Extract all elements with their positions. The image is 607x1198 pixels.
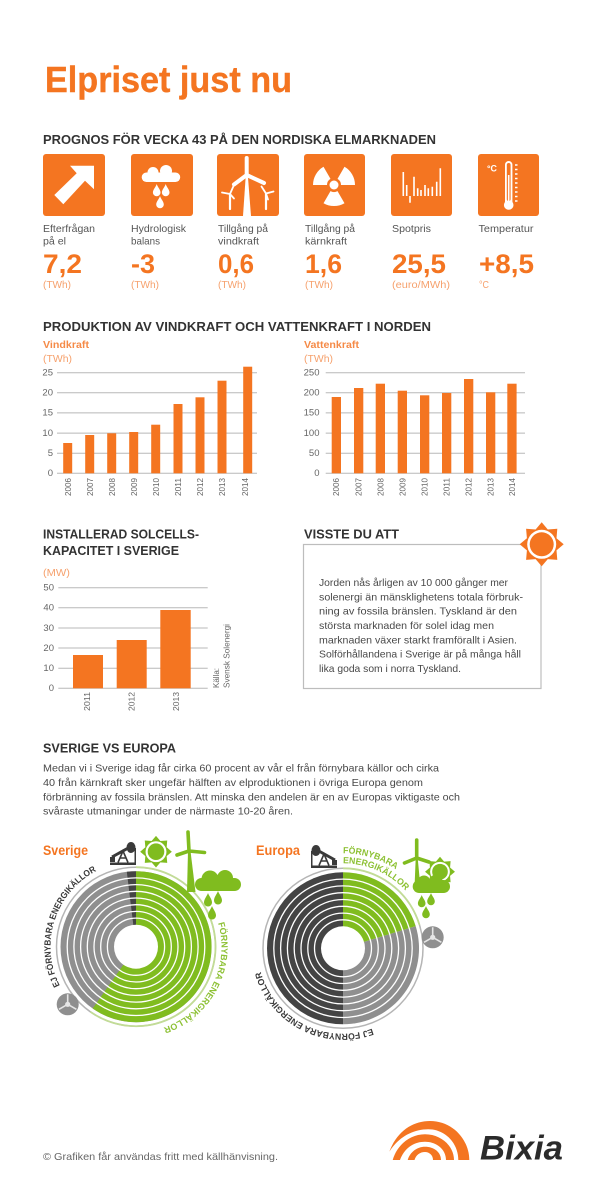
metric: wind supply: 0,6 (218, 249, 254, 279)
metric: nuclear supply: (TWh) (305, 280, 333, 291)
text block: solar facts: Jorden nås årligen av 10 000 gånger mer (319, 577, 508, 589)
metric: wind supply: Tillgång på (218, 223, 268, 235)
panel: did you know (304, 522, 564, 688)
text block: solar facts: största marknaden för solel idag men (319, 620, 494, 632)
bar chart: wind power: 2012 (195, 478, 205, 496)
bar chart: hydro power (304, 339, 525, 496)
source note: Källa: (211, 668, 221, 688)
bar chart: solar capacity: 2013 (171, 692, 181, 711)
logo: Bixia (389, 1121, 563, 1168)
metric: demand (43, 223, 95, 291)
heading: installed solar capacity: KAPACITET I SVERIGE (43, 543, 179, 558)
bar chart: solar capacity: 40 (43, 602, 54, 614)
heading: Sweden vs Europe: SVERIGE VS EUROPA (43, 740, 177, 756)
icon: green sun (425, 857, 455, 887)
icon: thermometer: °C (487, 164, 497, 174)
metric: spot price: 25,5 (392, 249, 446, 279)
bar chart: hydro power: 2010 (420, 478, 430, 496)
bar chart: wind power: 2013 (217, 478, 227, 496)
icon: hydrological cloud (131, 154, 193, 216)
bar chart: hydro power: 2008 (376, 478, 386, 496)
metric: wind supply: vindkraft (218, 236, 259, 248)
chart: Europe energy donut (255, 838, 455, 1042)
bar chart: hydro power: 100 (304, 428, 320, 439)
bar chart: wind power: 2009 (129, 478, 139, 496)
bar chart: hydro power: (TWh) (304, 354, 333, 365)
metric: spot price (392, 223, 450, 291)
bar chart: wind power: 2014 (240, 478, 250, 496)
bar chart: hydro power: 200 (304, 388, 320, 398)
text block: Sweden vs Europe: Medan vi i Sverige idag får cirka 60 procent av vår el från förnybara källor och cirka (43, 762, 439, 774)
metric: nuclear supply (305, 223, 355, 291)
bar chart: hydro power: 2006 (331, 478, 341, 496)
label: non-renewable: EJ FÖRNYBARA ENERGIKÄLLOR (255, 972, 374, 1042)
text block: Sweden vs Europe: 40 från kärnkraft sker ungefär hälften av elproduktionen i övriga Europa genom (43, 777, 423, 789)
label: renewable: FÖRNYBARA ENERGIKÄLLOR (164, 922, 228, 1033)
text block: solar facts: lika goda som i norra Tyskland. (319, 663, 461, 675)
metric: temperature: °C (479, 280, 489, 291)
bar chart: hydro power: 2011 (442, 478, 452, 496)
icon: grey radiation (422, 926, 444, 948)
bar chart: hydro power: 2009 (398, 478, 408, 496)
bar chart: wind power: 2011 (173, 478, 183, 496)
source note (211, 624, 232, 688)
icon: thermometer (478, 154, 539, 216)
metric: temperature (478, 223, 534, 291)
bar chart: wind power: 2010 (151, 478, 161, 496)
bar chart: solar capacity: 2011 (82, 692, 92, 711)
bar chart: solar capacity: (MW) (43, 568, 70, 579)
metric: hydrological balance: (TWh) (131, 280, 159, 291)
icon: wind turbines (217, 154, 279, 216)
heading: installed solar capacity: INSTALLERAD SOLCELLS- (43, 526, 199, 542)
bar chart: hydro power: Vattenkraft (304, 339, 359, 351)
text block: solar facts (319, 577, 524, 675)
text block: Sweden vs Europe: svåraste utmaningar under de närmaste 10-20 åren. (43, 806, 293, 818)
bar chart: wind power: 2007 (85, 478, 95, 496)
icon: oil pump (110, 842, 136, 865)
panel: forecast week 43 (43, 132, 539, 291)
chart: Europe energy donut: Europa (256, 843, 300, 858)
bar chart: wind power: 5 (48, 448, 53, 459)
bar chart: hydro power: 2013 (486, 478, 496, 496)
icon: demand arrow (43, 154, 105, 216)
icon: oil pump (311, 845, 337, 868)
metric: nuclear supply: kärnkraft (305, 236, 347, 248)
metric: demand: Efterfrågan (43, 223, 95, 235)
bar chart: wind power: 2008 (107, 478, 117, 496)
bar chart: hydro power: 0 (314, 468, 320, 479)
metric: hydrological balance (131, 223, 187, 291)
label: renewable: FÖRNYBARA (344, 846, 398, 870)
icon: grey radiation (57, 993, 79, 1015)
metric: demand: (TWh) (43, 280, 71, 291)
bar chart: solar capacity: 50 (43, 582, 54, 594)
icon: green rain cloud (195, 870, 241, 920)
metric: nuclear supply: Tillgång på (305, 223, 355, 235)
bar chart: hydro power: 50 (309, 448, 320, 459)
label: non-renewable: EJ FÖRNYBARA ENERGIKÄLLOR (44, 866, 96, 988)
metric: hydrological balance: balans (131, 236, 160, 248)
metric: temperature: Temperatur (478, 223, 534, 235)
heading: did you know: VISSTE DU ATT (304, 526, 399, 542)
bar chart: solar capacity: 20 (43, 643, 54, 654)
bar chart: hydro power: 2014 (507, 478, 517, 496)
bar chart: solar capacity: 30 (43, 623, 54, 634)
bar chart: wind power: 15 (42, 408, 53, 419)
bar chart: wind power (42, 339, 257, 496)
icon: green rain cloud (413, 874, 450, 918)
bar chart: wind power: 20 (42, 388, 53, 398)
icon: sun (520, 522, 564, 566)
bar chart: hydro power: 250 (304, 368, 320, 378)
text block: solar facts: marknaden växer starkt framförallt i Asien. (319, 634, 517, 646)
icon: green wind turbine (177, 832, 204, 892)
chart: Sweden energy donut (43, 830, 241, 1033)
icon: green sun (140, 836, 172, 868)
icon: spot price bars (391, 154, 452, 216)
metric: nuclear supply: 1,6 (305, 249, 342, 279)
label: renewable: ENERGIKÄLLOR (344, 857, 409, 890)
heading: forecast: PROGNOS FÖR VECKA 43 PÅ DEN NORDISKA ELMARKNADEN (43, 132, 436, 147)
bar chart: solar capacity: 2012 (126, 692, 136, 711)
title: Elpriset just nu (45, 59, 292, 100)
icon: green wind turbine (404, 840, 429, 888)
heading: wind and hydro production: PRODUKTION AV VINDKRAFT OCH VATTENKRAFT I NORDEN (43, 319, 431, 334)
text block: solar facts: solenergi än mänsklighetens totala förbruk- (319, 591, 524, 603)
text block: solar facts: ning av fossila bränslen. Tyskland är den (319, 606, 517, 618)
metric: hydrological balance: Hydrologisk (131, 223, 187, 235)
source note: Svensk Solenergi (222, 624, 232, 688)
bar chart: solar capacity: 0 (49, 683, 54, 694)
metric: wind supply: (TWh) (218, 280, 246, 291)
text block: solar facts: Solförhållandena i Sverige är på många håll (319, 649, 521, 661)
footer: credit line: © Grafiken får användas fritt med källhänvisning. (43, 1151, 278, 1163)
chart: Sweden energy donut: Sverige (43, 843, 88, 858)
metric: wind supply (218, 223, 268, 291)
bar chart: wind power: 2006 (63, 478, 73, 496)
bar chart: wind power: 10 (42, 428, 53, 439)
metric: demand: 7,2 (43, 249, 82, 279)
metric: spot price: Spotpris (392, 223, 431, 235)
text block: Sweden vs Europe: förbränning av fossila bränslen. Att minska den andelen är en av Europas viktigaste och (43, 791, 460, 803)
metric: spot price: (euro/MWh) (392, 280, 450, 291)
metric: hydrological balance: -3 (131, 249, 155, 279)
text block: Sweden vs Europe (43, 762, 460, 818)
bar chart: hydro power: 2012 (464, 478, 474, 496)
bar chart: solar capacity (43, 568, 232, 711)
logo: Bixia: Bixia (480, 1130, 563, 1168)
bar chart: solar capacity: 10 (43, 663, 54, 674)
bar chart: hydro power: 2007 (354, 478, 364, 496)
bar chart: wind power: (TWh) (43, 354, 72, 365)
bar chart: hydro power: 150 (304, 408, 320, 419)
bar chart: wind power: 25 (42, 368, 53, 378)
metric: demand: på el (43, 236, 66, 248)
bar chart: wind power: Vindkraft (43, 339, 89, 351)
heading: installed solar capacity (43, 526, 199, 558)
metric: temperature: +8,5 (479, 249, 534, 279)
bar chart: wind power: 0 (48, 468, 53, 479)
icon: radiation (304, 154, 365, 216)
